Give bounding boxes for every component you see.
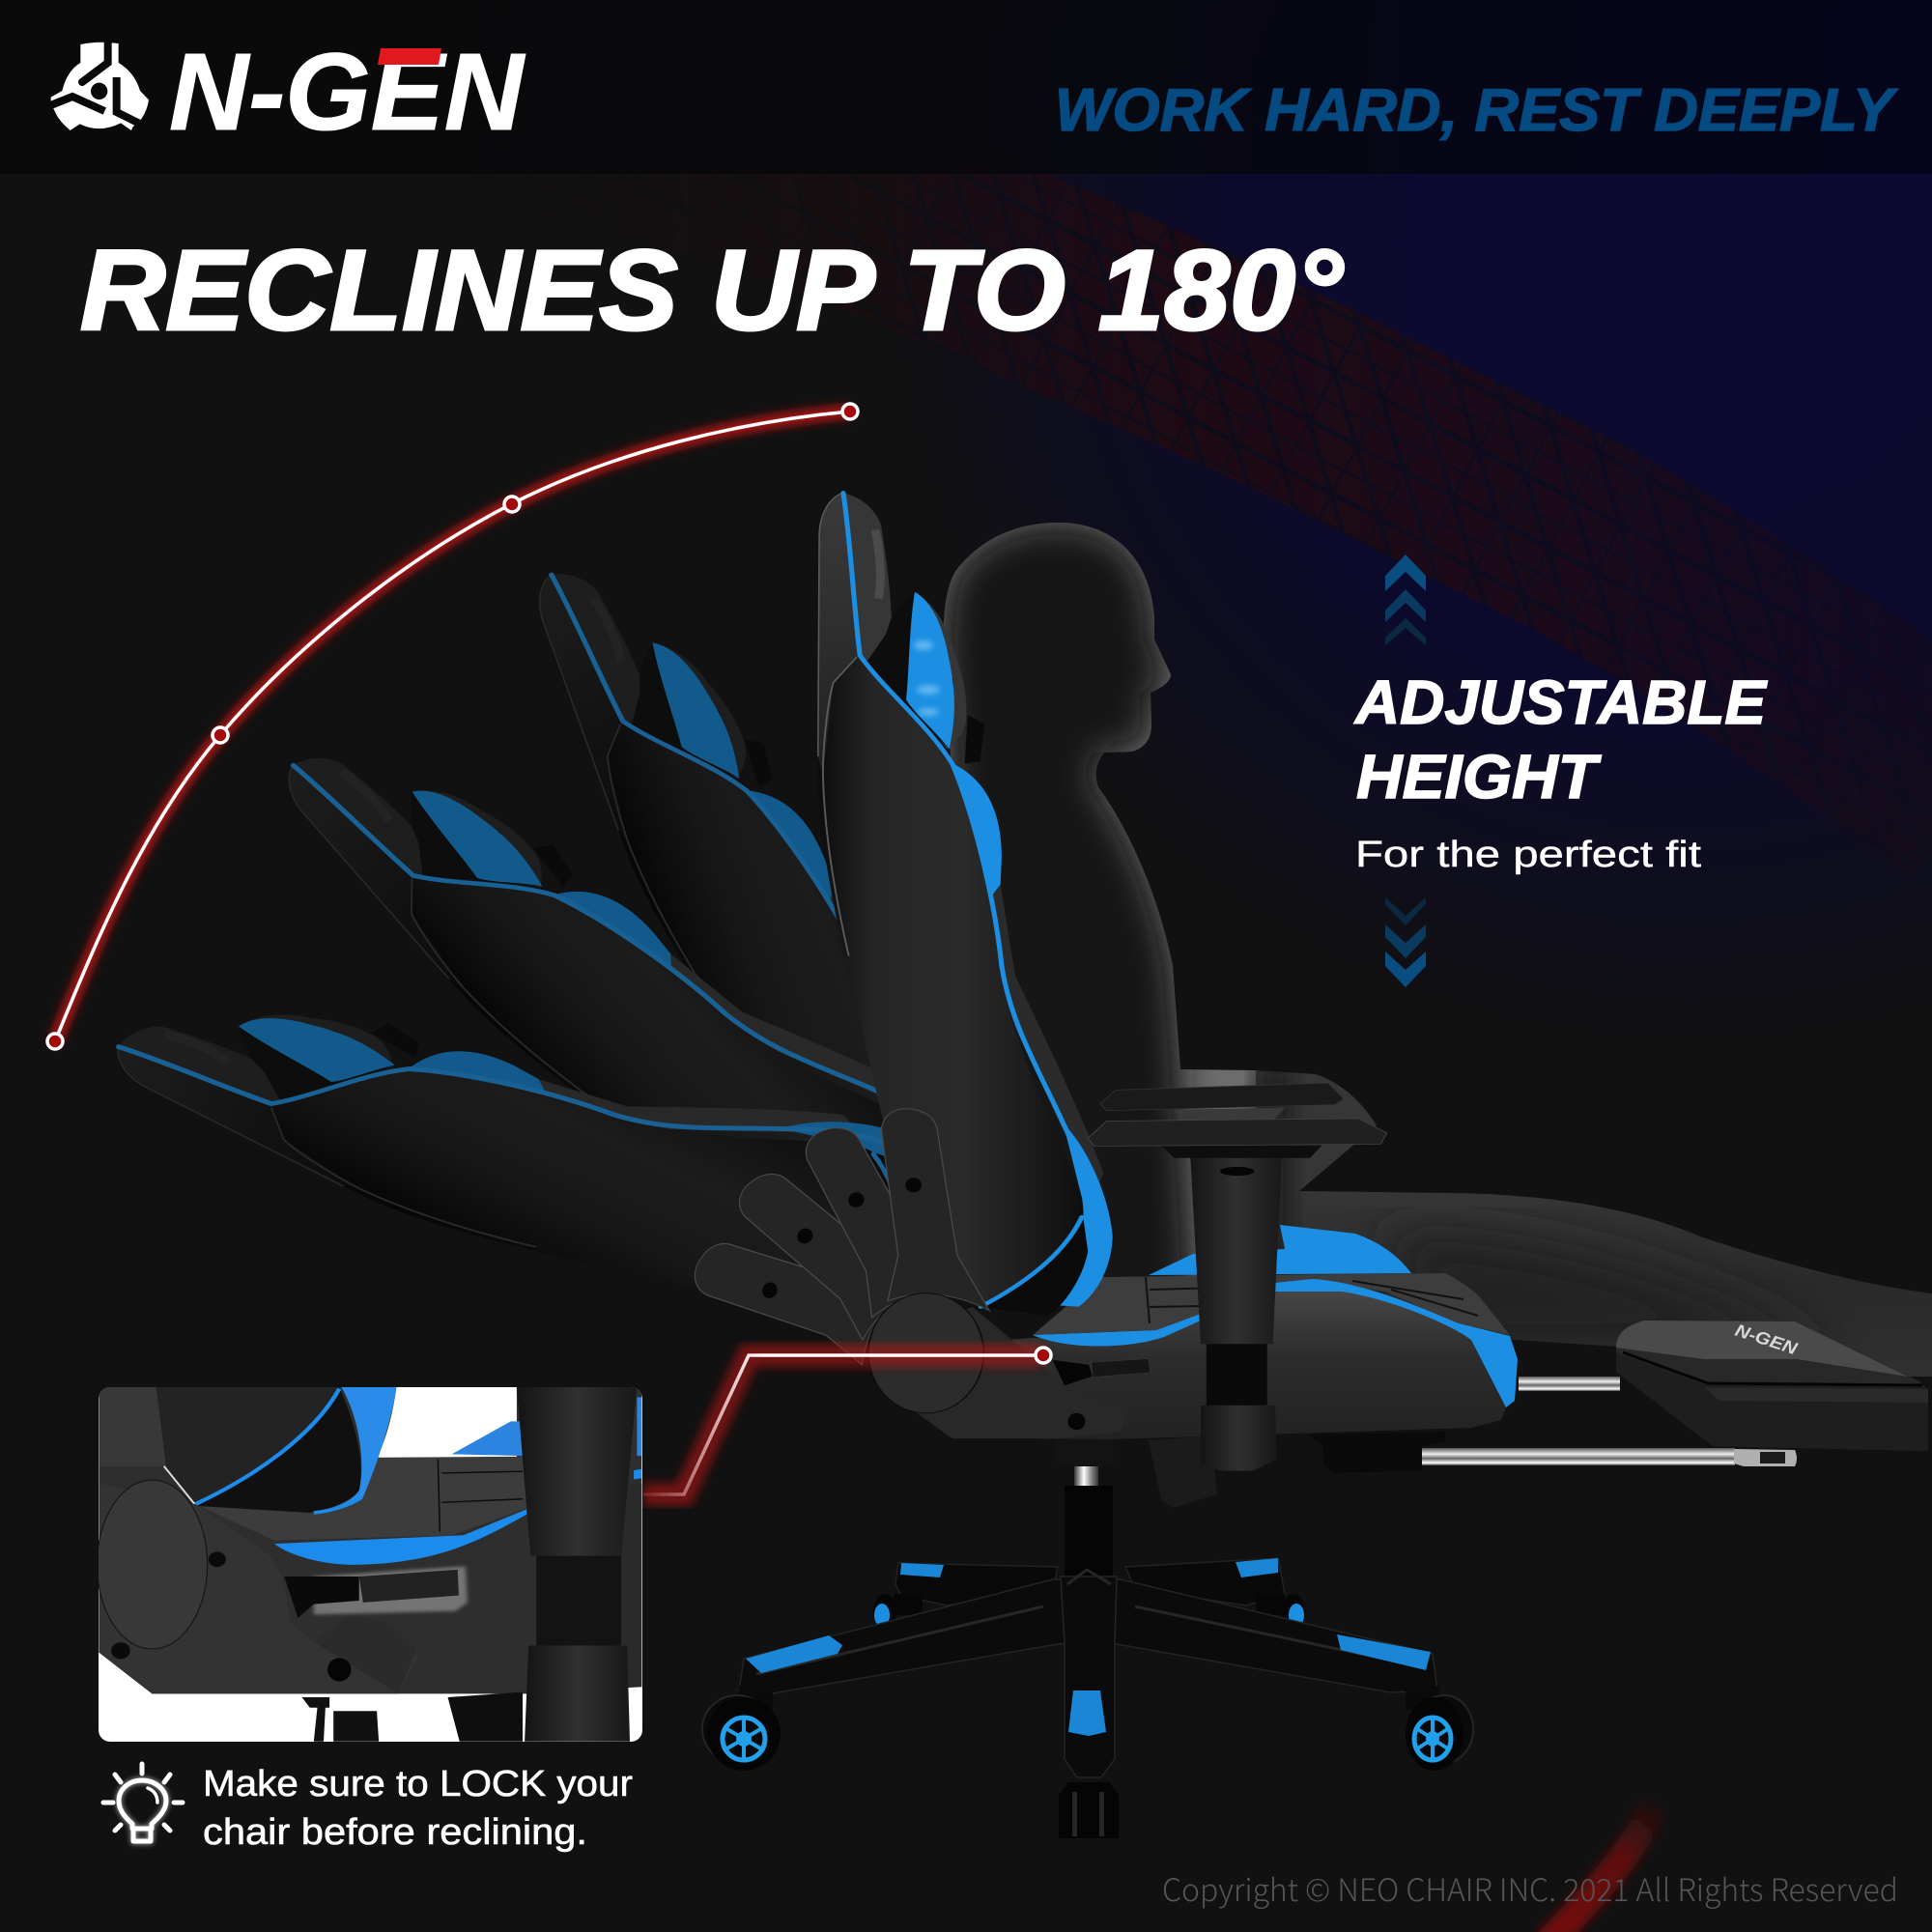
- tip text: Make sure to LOCK your: [203, 1764, 633, 1804]
- bracket plate: [868, 1307, 1128, 1438]
- reclined backrest position 3: [274, 586, 1040, 1397]
- logo wordmark: N-GEN: [169, 31, 526, 153]
- icon: light bulb: [103, 1764, 183, 1841]
- front star arms: [739, 1577, 1437, 1777]
- reclined side bracket 3: [730, 1128, 945, 1351]
- bracket hole: [1067, 1413, 1086, 1430]
- armrest and post: [1088, 1083, 1387, 1471]
- reclined backrest position 2: [527, 481, 1088, 1355]
- pillow highlights: [914, 640, 940, 716]
- heading: ADJUSTABLE: [1353, 668, 1768, 737]
- tire track background band: [917, 174, 1914, 794]
- office chair base and column: [702, 1436, 1473, 1838]
- inset dark base: [99, 1387, 641, 1693]
- copyright: Copyright © NEO CHAIR INC. 2021 All Rights Reserved: [1162, 1866, 1898, 1911]
- blue caps: [746, 1558, 1431, 1736]
- close-up inset photo of lock lever: [97, 1387, 642, 1742]
- heading: HEIGHT: [1356, 742, 1602, 811]
- gas lift: [1053, 1438, 1114, 1578]
- tip text: chair before reclining.: [203, 1812, 587, 1853]
- tip: lock before reclining: [103, 1764, 633, 1853]
- seat top dark band: [1033, 1273, 1510, 1335]
- down chevrons: [1385, 897, 1426, 987]
- reclined side bracket 2: [800, 1102, 971, 1329]
- up chevrons: [1385, 554, 1426, 645]
- header bar: [0, 0, 1932, 174]
- footrest pad: [1616, 1321, 1928, 1451]
- recliner disc: [868, 1293, 983, 1413]
- upright side bracket: [882, 1109, 989, 1311]
- lever halo: [314, 1566, 468, 1614]
- armrest pads: [1088, 1083, 1387, 1176]
- adjustable height block: [1353, 554, 1768, 987]
- star arm highlights: [756, 1570, 1420, 1674]
- upright backrest: [818, 493, 1113, 1316]
- seat cushion: [966, 1225, 1518, 1439]
- lock lever: [1053, 1358, 1151, 1385]
- human silhouette: [943, 523, 1932, 1377]
- rear caster stems: [894, 1594, 1285, 1615]
- reclined side bracket 4: [687, 1188, 916, 1375]
- reclined backrest position 4: [107, 806, 975, 1434]
- footrest logo: N-GEN: [1733, 1321, 1801, 1359]
- title: RECLINES UP TO 180°: [80, 227, 1344, 355]
- seat blue piping: [1275, 1279, 1518, 1407]
- recline arc with nodes: [47, 404, 858, 1049]
- footrest rails: [1308, 1377, 1797, 1473]
- rear star arms: [895, 1558, 1285, 1605]
- post: [1189, 1127, 1283, 1471]
- tip text: [203, 1764, 633, 1853]
- rear wheels: [873, 1594, 1305, 1629]
- tagline: WORK HARD, REST DEEPLY: [1055, 77, 1899, 144]
- subheading: For the perfect fit: [1355, 835, 1702, 875]
- front right wheel: [1406, 1686, 1473, 1771]
- logo icon: [48, 43, 149, 130]
- tilt knob: [1149, 1436, 1217, 1508]
- seat body: [966, 1292, 1506, 1439]
- footrest: [1308, 1321, 1928, 1473]
- red streak bottom right: [1546, 1804, 1655, 1932]
- seat rear blue cushion: [1149, 1225, 1411, 1275]
- callout leader line: [643, 1348, 1051, 1494]
- center wheel: [1059, 1782, 1119, 1838]
- recline bracket and disc: [868, 1293, 1151, 1438]
- heading: [1353, 668, 1768, 811]
- front left wheel: [702, 1686, 781, 1771]
